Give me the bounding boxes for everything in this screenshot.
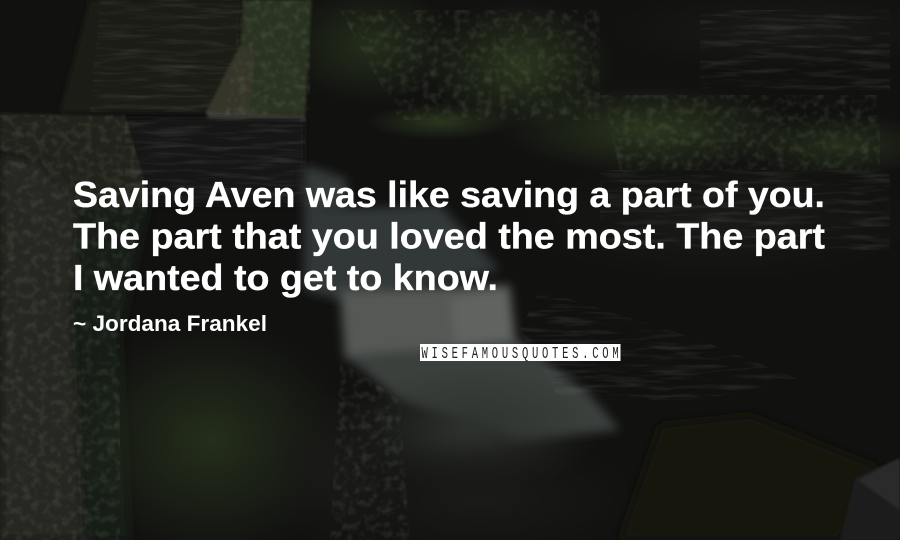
sky opening with foliage bbox=[205, 0, 312, 122]
quote text: Saving Aven was like saving a part of you. bbox=[73, 174, 825, 215]
rock strata and foliage texture bbox=[90, 0, 890, 400]
author attribution: ~ Jordana Frankel bbox=[73, 311, 267, 336]
quote text: The part that you loved the most. The part bbox=[73, 216, 825, 256]
left slope bbox=[0, 153, 90, 540]
left ledge bbox=[0, 113, 150, 240]
foliage below falls bbox=[340, 365, 600, 495]
dark pool bbox=[620, 415, 880, 540]
middle rock band bbox=[125, 118, 305, 205]
bottom-right rock bbox=[840, 458, 900, 540]
main waterfall bbox=[340, 285, 620, 440]
quote text bbox=[73, 174, 825, 298]
watermark badge: WISEFAMOUSQUOTES.COM bbox=[422, 345, 619, 364]
upper foliage glows bbox=[280, 0, 460, 105]
rock wall upper left bbox=[60, 0, 243, 112]
upper waterfall bbox=[304, 165, 500, 300]
quote text: I wanted to get to know. bbox=[73, 257, 498, 298]
